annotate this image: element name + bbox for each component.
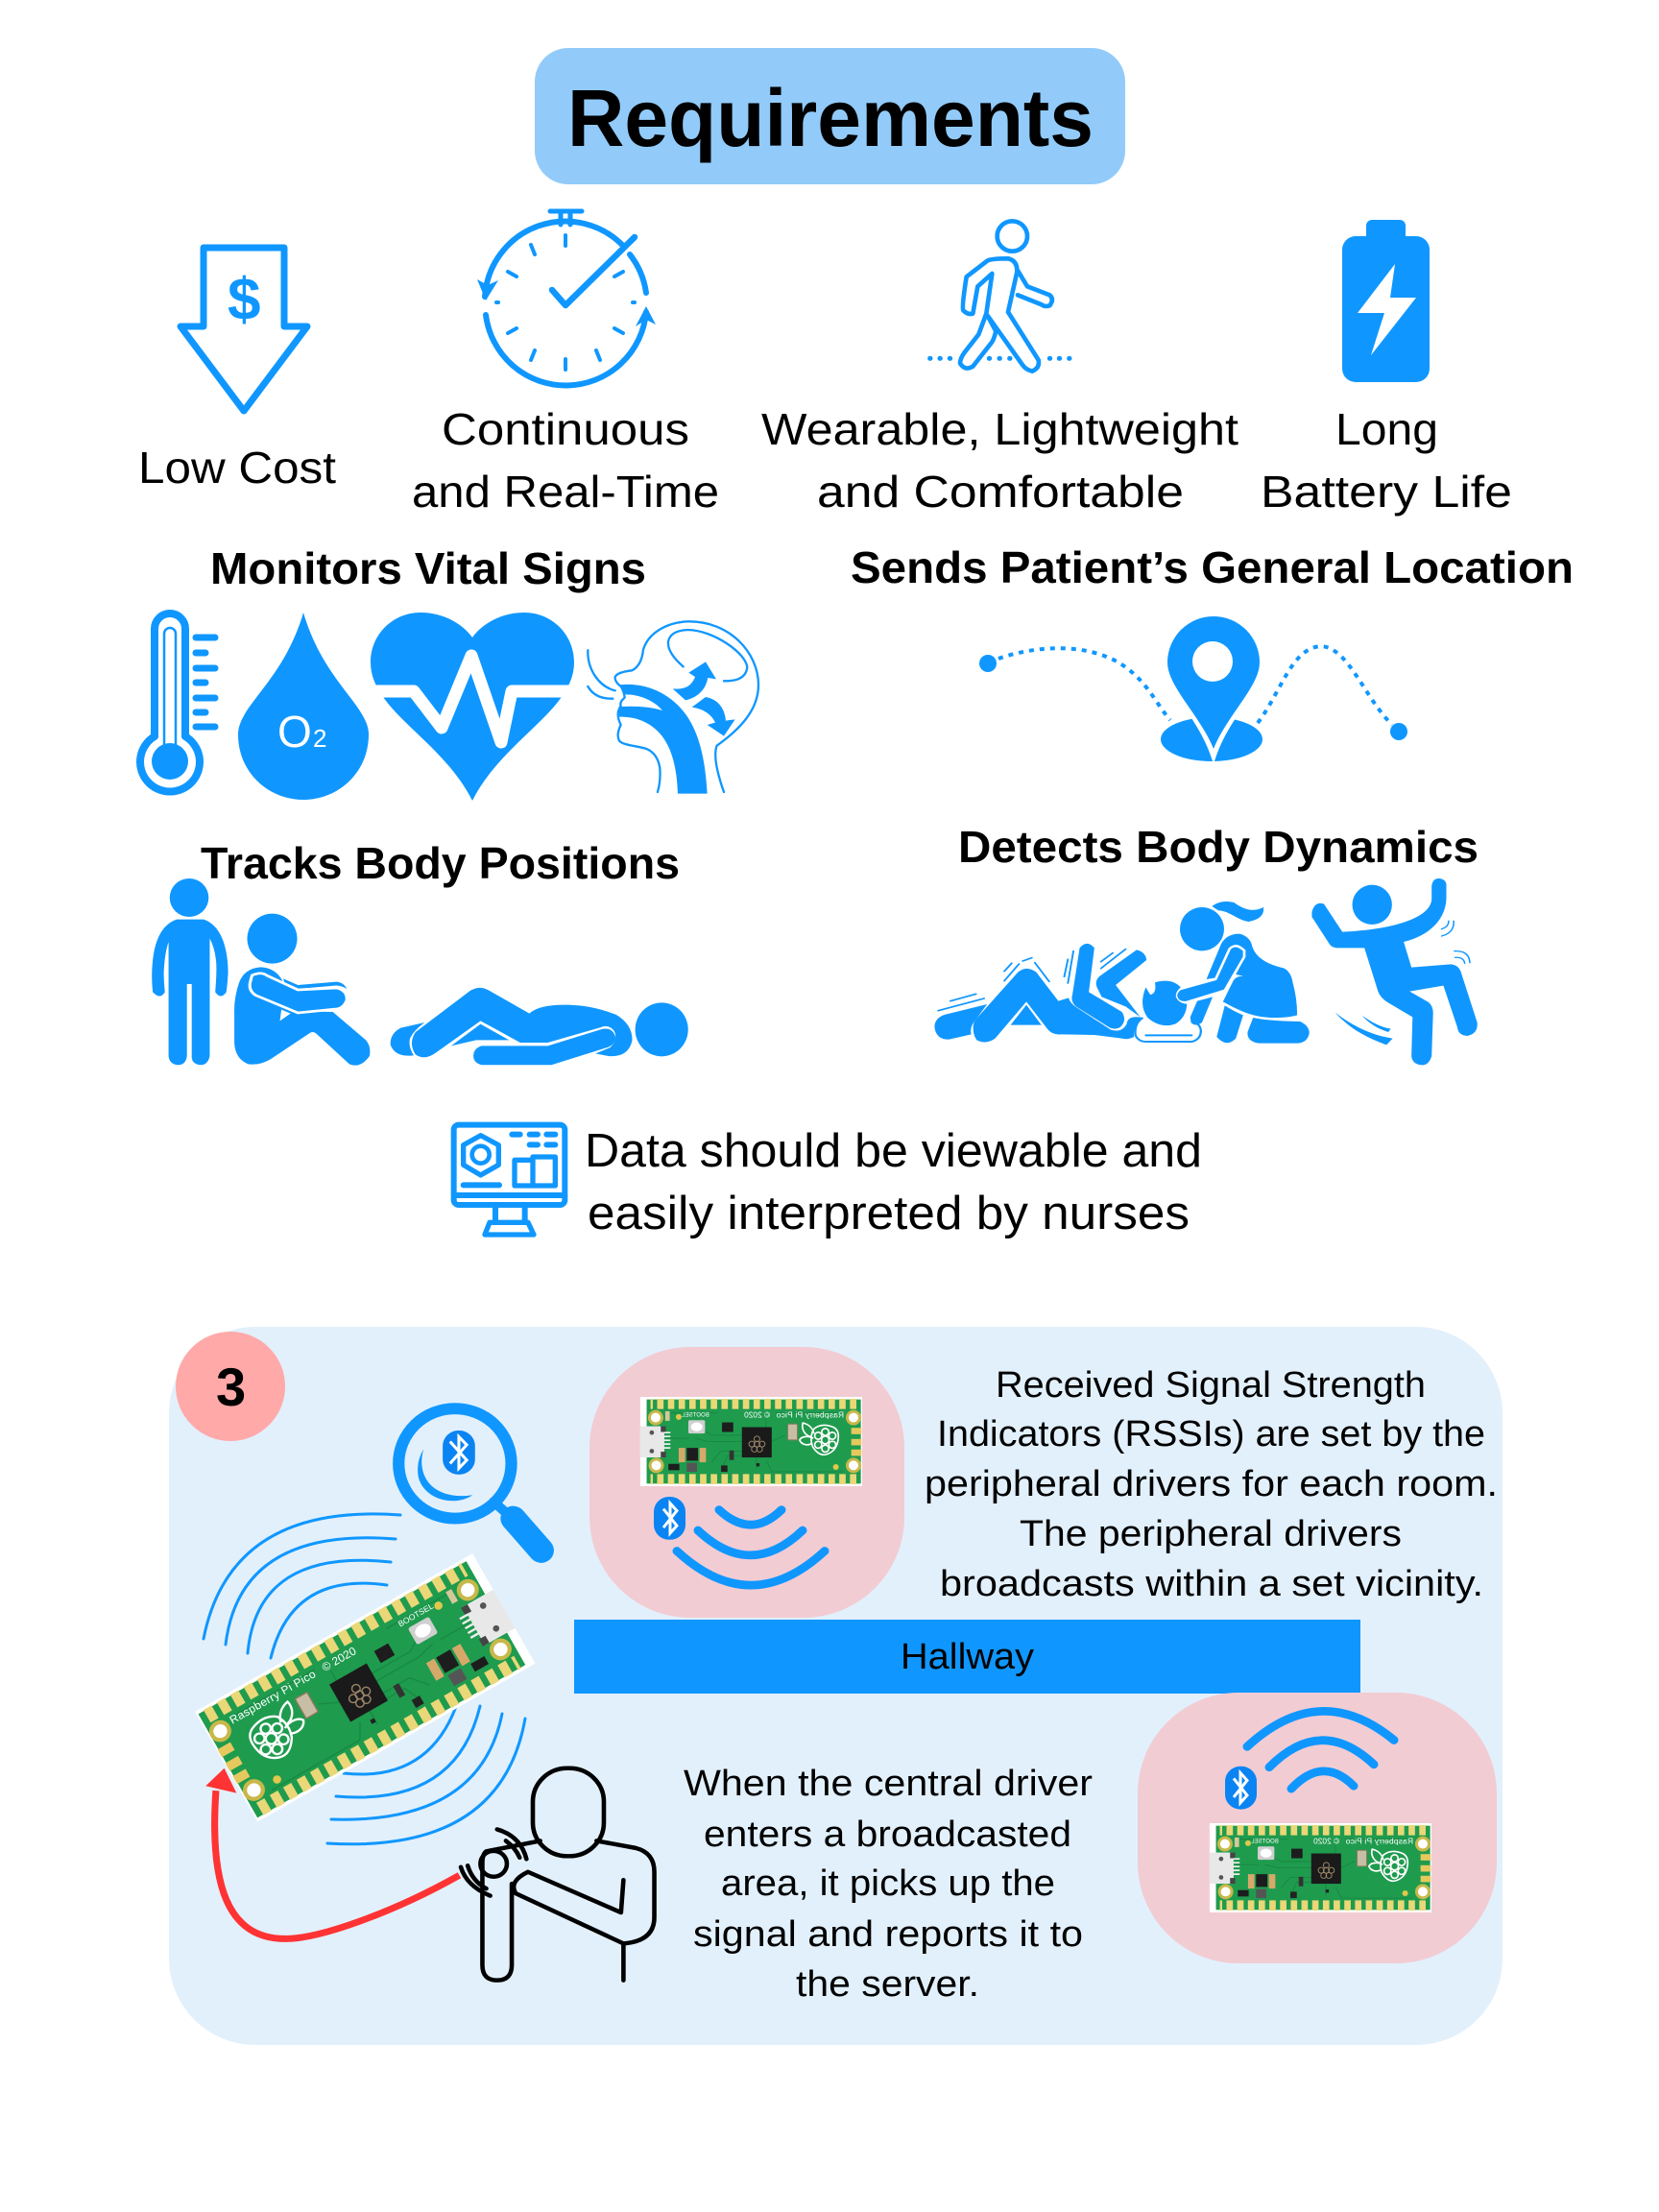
text: central driver description: When the central driver bbox=[684, 1764, 1093, 1804]
room: peripheral driver bottom: BOOTSEL bbox=[1251, 1839, 1279, 1845]
central driver board: Raspberry Pi Pico bbox=[228, 1667, 319, 1727]
step number badge: 3 bbox=[216, 1357, 246, 1417]
text: rssi description: broadcasts within a set vicinity. bbox=[940, 1564, 1483, 1604]
heading: monitors vital signs: Monitors Vital Signs bbox=[210, 543, 646, 593]
icon: thermometer bbox=[140, 613, 215, 792]
label: battery life: Battery Life bbox=[1261, 467, 1512, 517]
signal arcs around central driver bbox=[204, 1514, 525, 1844]
icon: lying person bbox=[391, 988, 688, 1065]
icon: location pin with path bbox=[979, 616, 1407, 761]
icon: magnifier with bluetooth bbox=[398, 1408, 541, 1551]
text: data viewable: easily interpreted by nurses bbox=[588, 1188, 1190, 1239]
icon: falling person bbox=[1311, 878, 1478, 1065]
icon: walking person bbox=[930, 221, 1070, 372]
label: continuous and real-time: Continuous bbox=[442, 404, 689, 454]
icon: battery bbox=[1342, 220, 1430, 382]
central driver board: © 2020 bbox=[320, 1644, 359, 1674]
icon: person wearing device bbox=[461, 1768, 655, 1981]
icon: patient on floor with raised legs bbox=[934, 944, 1146, 1042]
label: low cost: Low Cost bbox=[138, 443, 336, 493]
arrow: wearer to central driver bbox=[205, 1768, 459, 1938]
text: data viewable: Data should be viewable and bbox=[585, 1125, 1202, 1177]
label: wearable: and Comfortable bbox=[817, 467, 1184, 517]
label: wearable bbox=[761, 404, 1238, 517]
room: peripheral driver bottom: Raspberry Pi Pico bbox=[1345, 1837, 1413, 1846]
icon: oxygen drop: 2 bbox=[313, 724, 326, 753]
text: central driver description bbox=[684, 1764, 1093, 2005]
room: peripheral driver top: BOOTSEL bbox=[682, 1413, 709, 1419]
heading: tracks body positions: Tracks Body Positions bbox=[201, 838, 680, 888]
central driver board bbox=[195, 1553, 535, 1822]
icon: monitor dashboard bbox=[454, 1125, 565, 1235]
text: rssi description: peripheral drivers for each room. bbox=[925, 1464, 1498, 1504]
icon: heart with pulse bbox=[365, 613, 580, 801]
room: peripheral driver bottom bbox=[1138, 1693, 1497, 1963]
title: Requirements bbox=[567, 73, 1094, 163]
label: continuous and real-time: and Real-Time bbox=[412, 467, 719, 517]
hallway bar bbox=[574, 1620, 1360, 1694]
icon: sitting person bbox=[234, 914, 370, 1066]
label: wearable: Wearable, Lightweight bbox=[761, 404, 1238, 454]
title bbox=[535, 48, 1125, 184]
icon: oxygen drop: O bbox=[277, 707, 312, 757]
label: battery life bbox=[1261, 404, 1512, 517]
text: rssi description: Indicators (RSSIs) are set by the bbox=[937, 1414, 1485, 1455]
label: continuous and real-time bbox=[412, 404, 719, 517]
text: data viewable bbox=[585, 1125, 1202, 1239]
text: central driver description: area, it picks up the bbox=[721, 1863, 1055, 1904]
text: rssi description bbox=[925, 1365, 1498, 1604]
room: peripheral driver top bbox=[589, 1347, 904, 1618]
icon: stopwatch bbox=[477, 211, 656, 385]
icon: low cost arrow: $ bbox=[228, 267, 260, 333]
text: central driver description: the server. bbox=[796, 1964, 979, 2005]
text: central driver description: enters a broadcasted bbox=[704, 1815, 1071, 1855]
text: rssi description: Received Signal Strength bbox=[996, 1365, 1426, 1406]
room: peripheral driver top: © 2020 bbox=[744, 1410, 770, 1420]
icon: nurse performing aid bbox=[1135, 902, 1310, 1044]
room: peripheral driver top: Raspberry Pi Pico bbox=[776, 1410, 844, 1420]
label: battery life: Long bbox=[1335, 404, 1438, 454]
step number badge bbox=[176, 1332, 285, 1441]
icon: low cost arrow bbox=[180, 248, 307, 411]
hallway bar: Hallway bbox=[901, 1637, 1034, 1677]
icon: oxygen drop bbox=[238, 613, 369, 800]
heading: sends location: Sends Patient’s General Location bbox=[851, 542, 1574, 592]
room: peripheral driver bottom: © 2020 bbox=[1313, 1837, 1339, 1846]
text: central driver description: signal and reports it to bbox=[693, 1914, 1083, 1955]
text: rssi description: The peripheral drivers bbox=[1020, 1514, 1402, 1554]
central driver board: BOOTSEL bbox=[397, 1600, 435, 1628]
icon: standing person bbox=[152, 878, 228, 1065]
panel: room localisation bbox=[169, 1327, 1503, 2045]
heading: detects body dynamics: Detects Body Dynamics bbox=[958, 822, 1479, 872]
icon: airway head bbox=[588, 621, 758, 794]
